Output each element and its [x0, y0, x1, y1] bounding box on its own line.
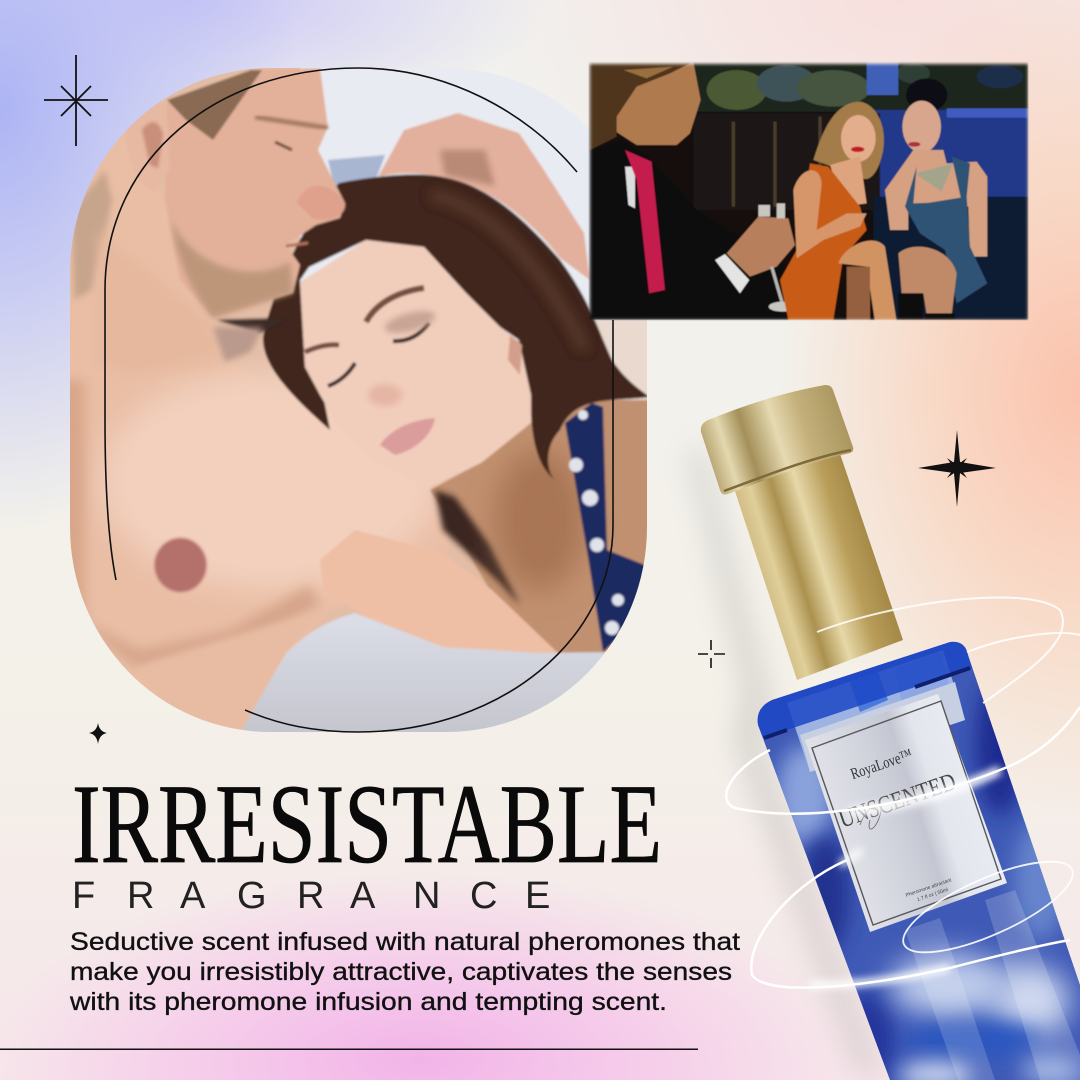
bottle cap — [701, 385, 853, 495]
pillow — [328, 155, 385, 190]
coloured rim — [758, 642, 972, 738]
translucent stripes — [905, 918, 995, 1080]
photo: embracing couple — [60, 60, 660, 740]
man's ear — [167, 150, 168, 171]
icon: large asterisk sparkle — [44, 55, 108, 146]
icon: broken plus — [698, 640, 725, 668]
woman's dress — [565, 403, 650, 652]
arch line frame: upper left — [105, 68, 577, 580]
bottom rule — [0, 1048, 698, 1050]
nebula colouring — [777, 745, 833, 845]
subtitle: FRAGRANCE — [72, 875, 550, 917]
title: IRRESISTABLE — [72, 762, 662, 887]
bottle neck — [728, 436, 903, 680]
icon: small star — [89, 723, 107, 744]
bottle label: Pheromone attractant — [905, 877, 953, 899]
bottle label: UNSCENTED — [835, 768, 960, 834]
woman's neck and chest — [430, 400, 655, 660]
description text: make you irresistibly attractive, captivates the senses — [70, 958, 732, 986]
bottle body — [750, 635, 1080, 1080]
glowing rings around bottle — [726, 597, 1080, 988]
description text: with its pheromone infusion and tempting scent. — [69, 988, 667, 1016]
woman's hand in hair — [378, 113, 590, 280]
perfume bottle — [701, 385, 1080, 1080]
man's head — [126, 68, 345, 362]
man's torso — [70, 172, 440, 668]
woman's face — [300, 240, 531, 488]
woman in orange — [813, 102, 884, 179]
arch line frame: lower right — [245, 320, 613, 732]
description text: Seductive scent infused with natural pheromones that — [70, 928, 740, 956]
photo: bar scene — [588, 62, 1028, 322]
bottle soft shadow — [690, 440, 880, 1075]
woman in blue — [906, 78, 947, 112]
woman's hair — [263, 175, 650, 480]
bottle label — [805, 694, 1007, 932]
icon: four-point star right — [918, 430, 996, 507]
man — [616, 62, 702, 146]
bottle label: 1.7 fl oz | 50ml — [916, 887, 949, 903]
bed sheet — [241, 612, 606, 732]
shoulder band — [787, 650, 965, 772]
hand on chest — [320, 530, 560, 655]
description text — [69, 928, 740, 1016]
bottle label: RoyaLove™ — [849, 746, 915, 783]
